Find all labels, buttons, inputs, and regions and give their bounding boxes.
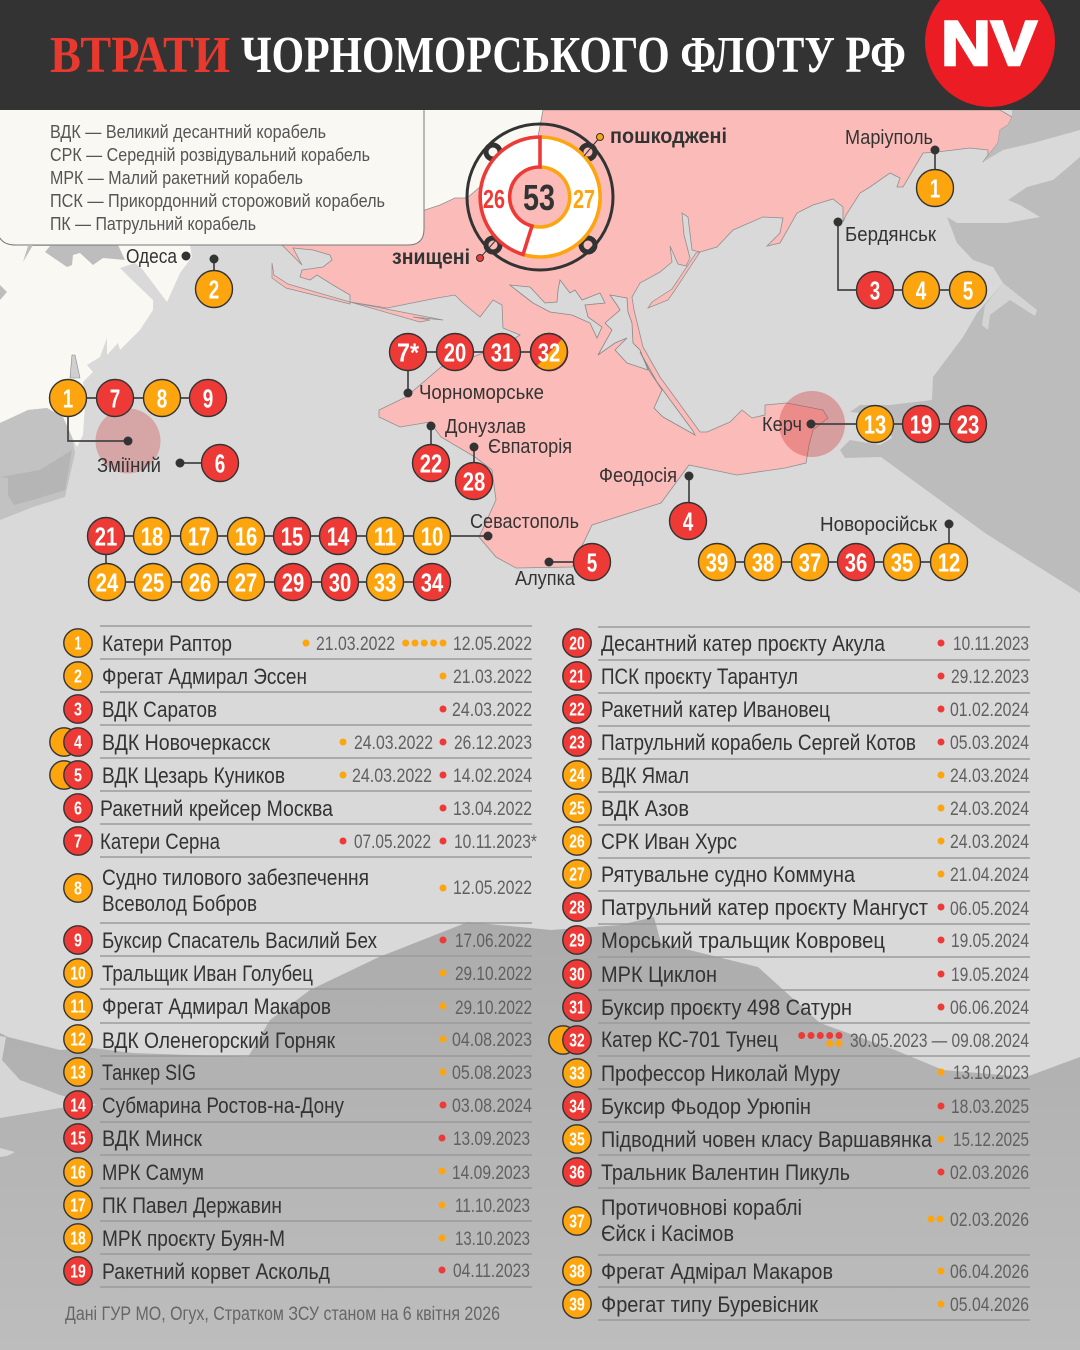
- row 32: Катер КС-701 Тунец: [601, 1027, 778, 1052]
- land: small island: [0, 1148, 15, 1157]
- row 22: [563, 695, 1029, 723]
- lifebuoy chart: 53 ships: 53: [523, 177, 555, 218]
- list: left column: [50, 626, 537, 1287]
- row 33: 33: [569, 1063, 585, 1084]
- row 24: [563, 761, 1029, 789]
- marker group: Sevastopol: 16: [235, 523, 257, 551]
- row 39: [563, 1290, 1029, 1318]
- row 1: 12.05.2022: [453, 634, 532, 655]
- row 17: 11.10.2023: [455, 1196, 530, 1217]
- land: Kinburn spit: [272, 263, 350, 304]
- row 6: 6: [74, 798, 82, 819]
- marker group: Novorossiysk: 12: [938, 549, 960, 577]
- row 34: 34: [569, 1096, 585, 1117]
- row 26: СРК Иван Хурс: [601, 829, 737, 854]
- row 5: 14.02.2024: [453, 766, 532, 787]
- row 4: 24.03.2022: [354, 733, 433, 754]
- label: destroyed: [392, 240, 496, 269]
- row 24: 24: [569, 765, 585, 786]
- row 13: [64, 1058, 532, 1086]
- row 14: Субмарина Ростов-на-Дону: [102, 1093, 344, 1118]
- row 33: Профессор Николай Муру: [601, 1061, 840, 1086]
- row 23: [563, 728, 1029, 756]
- lifebuoy chart: 53 ships: 27: [573, 184, 595, 214]
- row 27: 21.04.2024: [950, 865, 1029, 886]
- marker group: Chornomorske: 7*: [397, 339, 419, 367]
- row 14: [64, 1091, 532, 1119]
- legend panel: СРК — Середній розвідувальний корабель: [50, 144, 370, 165]
- row 22: 22: [569, 699, 585, 720]
- row 5: ВДК Цезарь Куников: [102, 763, 285, 788]
- marker group: Kerch: 13: [864, 411, 886, 439]
- marker group: Snake Island: [50, 380, 238, 482]
- row 11: 11: [70, 996, 86, 1017]
- row 39: Фрегат типу Буревісник: [601, 1292, 818, 1317]
- row 16: [64, 1158, 530, 1186]
- row 1: Катери Раптор: [102, 631, 232, 656]
- marker group: Sevastopol: 18: [141, 523, 163, 551]
- marker group: Chornomorske: 31: [491, 339, 513, 367]
- marker group: Feodosia: 4: [683, 508, 694, 536]
- marker group: Chornomorske: 20: [444, 339, 466, 367]
- land: Arabat gap: [640, 352, 695, 435]
- row 23: Патрульний корабель Сергей Котов: [601, 730, 916, 755]
- row 20: 20: [569, 633, 585, 654]
- row 21: 29.12.2023: [951, 667, 1029, 688]
- marker group: Sevastopol: 15: [281, 523, 303, 551]
- row 2: [64, 662, 532, 690]
- marker group: Novorossiysk: 37: [799, 549, 821, 577]
- row 2: Фрегат Адмирал Эссен: [102, 664, 307, 689]
- marker group: Kerch: 19: [910, 411, 932, 439]
- row 32: [549, 1026, 1029, 1054]
- row 28: 06.05.2024: [950, 899, 1029, 920]
- marker group: Yevpatoria: [456, 436, 572, 500]
- row 28: Патрульний катер проєкту Мангуст: [601, 895, 928, 920]
- marker group: Yevpatoria: Євпаторія: [488, 436, 572, 458]
- row 23: 23: [569, 732, 585, 753]
- source note: Дані ГУР МО, Огух, Стратком ЗСУ станом на 6 квітня 2026: [65, 1304, 500, 1325]
- row 30: [563, 960, 1029, 988]
- land: Sasyk lagoon: [70, 355, 80, 378]
- row 10: 29.10.2022: [455, 964, 532, 985]
- row 37: Єйск і Касімов: [601, 1221, 734, 1246]
- row 16: 16: [70, 1162, 86, 1183]
- row 36: Тральник Валентин Пикуль: [601, 1160, 850, 1185]
- row 29: [563, 926, 1029, 954]
- row 4: 26.12.2023: [454, 733, 532, 754]
- marker group: Odesa: 2: [209, 276, 219, 304]
- row 18: [64, 1224, 530, 1252]
- row 21: ПСК проєкту Тарантул: [601, 664, 798, 689]
- row 38: Фрегат Адмірал Макаров: [601, 1259, 833, 1284]
- row 39: 05.04.2026: [950, 1295, 1029, 1316]
- marker group: Sevastopol: 10: [421, 523, 443, 551]
- marker group: Snake Island: Зміїний: [97, 455, 161, 477]
- row 20: Десантний катер проєкту Акула: [601, 631, 886, 656]
- row 9: [64, 926, 532, 954]
- row 25: [563, 794, 1029, 822]
- row 24: ВДК Ямал: [601, 763, 689, 788]
- row 12: [64, 1025, 532, 1053]
- marker group: Chornomorske: [390, 334, 568, 404]
- row 12: 12: [70, 1029, 86, 1050]
- row 1: 21.03.2022: [316, 634, 395, 655]
- land: Danube region shade: [0, 450, 72, 505]
- row 14: 14: [70, 1095, 86, 1116]
- row 36: 02.03.2026: [950, 1163, 1029, 1184]
- legend panel: ВДК — Великий десантний корабель: [50, 121, 326, 142]
- row 9: 9: [74, 930, 82, 951]
- marker group: Kerch: 23: [957, 411, 979, 439]
- marker group: Donuzlav: [412, 416, 526, 482]
- list: right column: [549, 627, 1030, 1320]
- row 3: ВДК Саратов: [102, 697, 217, 722]
- row 28: [563, 893, 1029, 921]
- row 11: Фрегат Адмирал Макаров: [102, 994, 331, 1019]
- marker group: Sevastopol: 14: [327, 523, 350, 551]
- row 8: Всеволод Бобров: [102, 891, 257, 916]
- marker group: Mariupol: Маріуполь: [845, 127, 933, 149]
- row 35: 15.12.2025: [953, 1130, 1029, 1151]
- row 37: 37: [569, 1211, 585, 1232]
- row 8: Судно тилового забезпечення: [102, 865, 369, 890]
- marker group: Sevastopol: [88, 511, 579, 600]
- row 30: МРК Циклон: [601, 962, 717, 987]
- land: occupied territories and Crimea: [282, 110, 1012, 568]
- row 10: [64, 959, 532, 987]
- marker group: Sevastopol: 30: [329, 569, 351, 597]
- row 16: МРК Самум: [102, 1160, 204, 1185]
- row 26: [563, 827, 1029, 855]
- row 34: [563, 1092, 1029, 1120]
- marker group: Novorossiysk: Новоросійськ: [820, 514, 937, 536]
- row 20: 10.11.2023: [953, 634, 1029, 655]
- row 18: 13.10.2023: [455, 1229, 530, 1250]
- land: Syvash east: [598, 295, 648, 370]
- marker group: Mariupol: [845, 127, 954, 206]
- marker group: Sevastopol: 21: [95, 523, 117, 551]
- title: [50, 27, 906, 84]
- row 10: Тральщик Иван Голубец: [102, 961, 313, 986]
- row 37: Протичовнові кораблі: [601, 1195, 802, 1220]
- row 23: 05.03.2024: [950, 733, 1029, 754]
- row 26: 24.03.2024: [950, 832, 1029, 853]
- row 8: [64, 865, 532, 916]
- marker group: Sevastopol: 25: [142, 569, 164, 597]
- marker group: Novorossiysk: [698, 514, 968, 580]
- row 20: [563, 629, 1029, 657]
- highlight: Kerch: [779, 391, 845, 457]
- row 35: Підводний човен класу Варшавянка: [601, 1127, 933, 1152]
- row 34: 18.03.2025: [951, 1097, 1029, 1118]
- title: ВТРАТИ: [50, 27, 230, 84]
- row 15: ВДК Минск: [102, 1126, 202, 1151]
- row 39: 39: [569, 1294, 585, 1315]
- marker group: Berdiansk: 3: [870, 277, 880, 305]
- row 31: 31: [569, 997, 585, 1018]
- row 35: 35: [569, 1129, 585, 1150]
- row 14: 03.08.2024: [452, 1096, 532, 1117]
- row 8: 8: [74, 878, 82, 899]
- marker group: Sevastopol: 33: [374, 569, 396, 597]
- marker group: Novorossiysk: 35: [891, 549, 913, 577]
- row 25: 25: [569, 798, 585, 819]
- marker group: Feodosia: Феодосія: [599, 465, 677, 487]
- marker group: Donuzlav: 22: [420, 450, 442, 478]
- row 7: [64, 827, 537, 855]
- marker group: Odesa: Одеса: [126, 246, 178, 268]
- row 19: 19: [70, 1261, 86, 1282]
- marker group: Sevastopol: 34: [421, 569, 444, 597]
- row 27: [563, 860, 1029, 888]
- marker group: Novorossiysk: 38: [752, 549, 774, 577]
- marker group: Sevastopol: 24: [96, 569, 119, 597]
- row 13: 13: [70, 1062, 86, 1083]
- row 15: 15: [70, 1128, 86, 1149]
- row 5: 5: [74, 765, 82, 786]
- row 28: 28: [569, 897, 585, 918]
- row 5: 24.03.2022: [352, 766, 432, 787]
- row 9: 17.06.2022: [455, 931, 532, 952]
- marker group: Alupka: 5: [587, 549, 597, 577]
- row 17: ПК Павел Державин: [102, 1193, 282, 1218]
- highlight: Snake Island: [96, 408, 160, 474]
- row 12: ВДК Оленегорский Горняк: [102, 1028, 335, 1053]
- row 36: [563, 1158, 1029, 1186]
- row 12: 04.08.2023: [452, 1030, 532, 1051]
- land: Obytichna spit: [648, 252, 700, 308]
- row 25: ВДК Азов: [601, 796, 689, 821]
- marker group: Kerch: Керч: [762, 414, 802, 436]
- header bar: [0, 0, 1080, 110]
- row 38: 06.04.2026: [950, 1262, 1029, 1283]
- row 2: 2: [74, 666, 82, 687]
- legend panel: МРК — Малий ракетний корабель: [50, 167, 303, 188]
- marker group: Snake Island: 8: [157, 385, 167, 413]
- legend panel: [0, 110, 424, 245]
- row 7: Катери Серна: [100, 829, 221, 854]
- row 11: 29.10.2022: [455, 998, 532, 1019]
- land: Syvash west: [510, 280, 605, 338]
- row 18: 18: [70, 1228, 86, 1249]
- row 21: 21: [569, 666, 585, 687]
- row 30: 30: [569, 964, 585, 985]
- marker group: Berdiansk: Бердянськ: [845, 224, 936, 246]
- row 32: 32: [569, 1030, 585, 1051]
- row 19: Ракетний корвет Аскольд: [102, 1259, 330, 1284]
- marker group: Sevastopol: 26: [189, 569, 211, 597]
- row 25: 24.03.2024: [950, 799, 1029, 820]
- land: Marmara sea: [0, 1036, 97, 1118]
- land: Turkey: [0, 917, 1080, 1350]
- row 19: [64, 1257, 530, 1285]
- row 15: 13.09.2023: [453, 1129, 530, 1150]
- marker group: Chornomorske: Чорноморське: [419, 382, 544, 404]
- row 5: [50, 761, 532, 789]
- marker group: Sevastopol: Севастополь: [470, 511, 579, 533]
- row 7: 7: [74, 831, 82, 852]
- row 31: [563, 993, 1029, 1021]
- title: ЧОРНОМОРСЬКОГО ФЛОТУ РФ: [241, 27, 906, 84]
- row 27: 27: [569, 864, 585, 885]
- row 7: 07.05.2022: [354, 832, 431, 853]
- row 4: [50, 728, 532, 756]
- row 31: 06.06.2024: [950, 998, 1029, 1019]
- row 6: 13.04.2022: [453, 799, 532, 820]
- row 13: 05.08.2023: [452, 1063, 532, 1084]
- marker group: Snake Island: 6: [215, 450, 225, 478]
- row 17: [64, 1191, 530, 1219]
- marker group: Sevastopol: 27: [235, 569, 257, 597]
- marker group: Alupka: Алупка: [515, 568, 576, 590]
- marker group: Sevastopol: 11: [374, 523, 396, 551]
- row 29: 29: [569, 930, 585, 951]
- legend panel: ПСК — Прикордонний сторожовий корабель: [50, 190, 385, 211]
- land: Russia east: [840, 157, 1080, 593]
- row 1: [64, 629, 532, 657]
- land: Odesa lagoons: [23, 245, 125, 267]
- row 11: [64, 992, 532, 1020]
- marker group: Berdiansk: [834, 218, 986, 308]
- marker group: Odesa: [126, 246, 232, 308]
- row 1: 1: [74, 633, 82, 654]
- land: Kuban lagoon: [982, 283, 1037, 330]
- land: Tendra spit: [350, 302, 443, 322]
- row 35: [563, 1125, 1029, 1153]
- row 10: 10: [70, 963, 86, 984]
- row 29: 19.05.2024: [951, 931, 1029, 952]
- logo: NV: NV: [941, 9, 1037, 79]
- marker group: Sevastopol: 17: [188, 523, 210, 551]
- row 4: ВДК Новочеркасск: [102, 730, 270, 755]
- lifebuoy chart: 53 ships: 26: [483, 184, 505, 214]
- row 29: Морський тральщик Ковровец: [601, 928, 885, 953]
- marker group: Alupka: [515, 544, 610, 590]
- label: damaged: пошкоджені: [610, 125, 727, 148]
- row 31: Буксир проєкту 498 Сатурн: [601, 995, 852, 1020]
- row 3: 3: [74, 699, 82, 720]
- row 21: [563, 662, 1029, 690]
- row 3: [64, 695, 532, 723]
- marker group: Feodosia: [599, 465, 706, 540]
- marker group: Sevastopol: 29: [282, 569, 304, 597]
- marker group: Berdiansk: 5: [963, 277, 973, 305]
- land: Romania and Bulgaria: [0, 408, 75, 520]
- row 26: 26: [569, 831, 585, 852]
- legend panel: ПК — Патрульний корабель: [50, 213, 256, 234]
- row 33: [563, 1059, 1029, 1087]
- row 22: Ракетний катер Ивановец: [601, 697, 830, 722]
- row 6: [64, 794, 532, 822]
- marker group: Snake Island: 1: [63, 385, 73, 413]
- logo: NV: [925, 0, 1055, 107]
- land: Ukraine mainland: [0, 110, 560, 447]
- marker group: Berdiansk: 4: [916, 277, 927, 305]
- row 13: Танкер SIG: [102, 1060, 196, 1085]
- row 37: [563, 1195, 1029, 1246]
- row 8: 12.05.2022: [453, 878, 532, 899]
- row 24: 24.03.2024: [950, 766, 1029, 787]
- row 34: Буксир Фьодор Урюпін: [601, 1094, 811, 1119]
- row 9: Буксир Спасатель Василий Бех: [102, 928, 377, 953]
- lifebuoy chart: 53 ships: [467, 124, 613, 270]
- row 38: [563, 1257, 1029, 1285]
- marker group: Mariupol: 1: [930, 175, 940, 203]
- row 38: 38: [569, 1261, 585, 1282]
- row 27: Рятувальне судно Коммуна: [601, 862, 856, 887]
- label: damaged: [584, 125, 727, 156]
- marker group: Snake Island: 9: [203, 385, 213, 413]
- row 32: 30.05.2023 — 09.08.2024: [850, 1031, 1029, 1052]
- marker group: Snake Island: 7: [110, 385, 120, 413]
- marker group: Chornomorske: 32: [538, 339, 560, 367]
- marker group: Novorossiysk: 36: [845, 549, 867, 577]
- land: western edge fragment: [0, 285, 7, 300]
- row 19: 04.11.2023: [453, 1261, 530, 1282]
- row 37: 02.03.2026: [950, 1210, 1029, 1231]
- marker group: Novorossiysk: 39: [706, 549, 728, 577]
- row 6: Ракетний крейсер Москва: [100, 796, 334, 821]
- row 3: 24.03.2022: [452, 700, 532, 721]
- row 2: 21.03.2022: [453, 667, 532, 688]
- row 22: 01.02.2024: [950, 700, 1029, 721]
- marker group: Yevpatoria: 28: [463, 468, 485, 496]
- label: destroyed: знищені: [392, 246, 470, 269]
- row 30: 19.05.2024: [951, 965, 1029, 986]
- land: Russia north-east: [983, 110, 1080, 162]
- marker group: Kerch: [762, 406, 986, 442]
- row 4: 4: [74, 732, 83, 753]
- row 18: МРК проєкту Буян-М: [102, 1226, 285, 1251]
- row 36: 36: [569, 1162, 585, 1183]
- row 16: 14.09.2023: [452, 1163, 530, 1184]
- row 15: [64, 1124, 530, 1152]
- marker group: Donuzlav: Донузлав: [445, 416, 526, 438]
- row 33: 13.10.2023: [953, 1063, 1029, 1084]
- row 7: 10.11.2023*: [454, 832, 537, 853]
- row 17: 17: [70, 1195, 86, 1216]
